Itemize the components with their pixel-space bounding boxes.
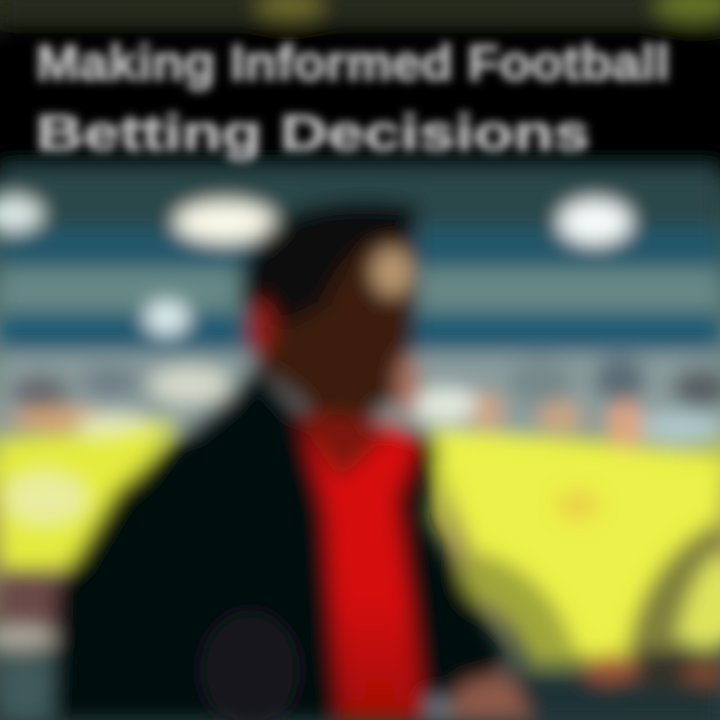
stadium background [0, 160, 720, 449]
title: Making Informed Football [36, 35, 670, 91]
title [36, 35, 670, 161]
foreground seats and railing [0, 520, 720, 720]
top title band [0, 0, 720, 168]
man in dark jacket and red shirt [52, 201, 532, 720]
floodlights [0, 197, 631, 335]
title: Betting Decisions [36, 105, 590, 161]
pitch [0, 418, 720, 672]
